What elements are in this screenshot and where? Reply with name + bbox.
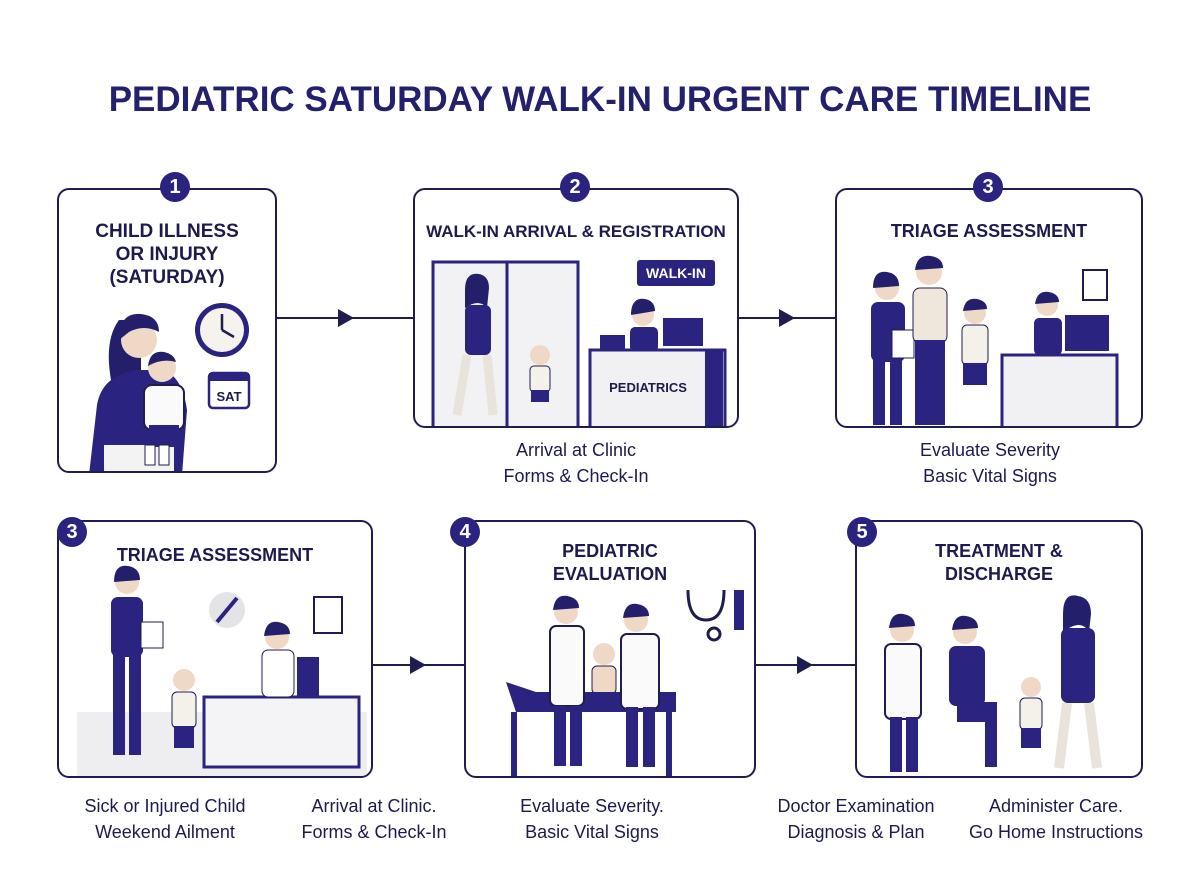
panel: treatment & discharge — [855, 520, 1143, 778]
badge 1: 1 — [169, 176, 181, 198]
caption 2: Arrival at Clinic — [516, 440, 636, 460]
caption row2 4: Doctor Examination — [777, 796, 935, 816]
panel: pediatric evaluation — [464, 520, 756, 778]
arrow: 2 to 3 — [739, 309, 835, 327]
caption row2 2: Forms & Check-In — [301, 822, 447, 842]
heading: CHILD ILLNESS — [95, 221, 239, 242]
badge 2 — [560, 172, 590, 202]
illustration — [884, 595, 1102, 772]
heading: TRIAGE ASSESSMENT — [891, 221, 1087, 241]
caption 3 — [920, 440, 1060, 486]
arrow: row2 2 to 3 — [756, 656, 855, 674]
caption row2 1: Sick or Injured Child — [84, 796, 246, 816]
caption 2: Forms & Check-In — [503, 466, 649, 486]
badge 4 — [450, 517, 480, 547]
heading: WALK-IN ARRIVAL & REGISTRATION — [426, 222, 726, 241]
panel: triage — [835, 188, 1143, 428]
caption row2 1: Weekend Ailment — [95, 822, 235, 842]
caption 3: Basic Vital Signs — [923, 466, 1057, 486]
illustration: nurses and child — [871, 256, 1118, 426]
panel: walk-in arrival — [413, 188, 739, 428]
caption row2 5: Administer Care. — [989, 796, 1123, 816]
illustration: doctors, child, stethoscope — [506, 590, 744, 776]
caption row2 3: Evaluate Severity. — [520, 796, 664, 816]
badge 3 row 2 — [57, 517, 87, 547]
heading: (SATURDAY) — [109, 267, 225, 288]
heading — [935, 541, 1063, 584]
heading: OR INJURY — [116, 244, 218, 265]
badge 5 — [847, 517, 877, 547]
heading — [553, 541, 667, 584]
badge 1 — [160, 172, 190, 202]
heading: TRIAGE ASSESSMENT — [117, 545, 313, 565]
panel: child illness — [57, 188, 277, 473]
arrow: row2 1 to 2 — [373, 656, 464, 674]
heading: EVALUATION — [553, 564, 667, 584]
caption row2 1 — [84, 796, 246, 842]
title: PEDIATRIC SATURDAY WALK-IN URGENT CARE TIMELINE — [109, 80, 1091, 119]
caption row2 2: Arrival at Clinic. — [311, 796, 437, 816]
caption row2 2 — [301, 796, 447, 842]
caption row2 3 — [520, 796, 664, 842]
badge 3 row 2: 3 — [66, 521, 78, 543]
caption 3: Evaluate Severity — [920, 440, 1060, 460]
panel: triage row 2 — [57, 520, 373, 778]
caption row2 5: Go Home Instructions — [969, 822, 1143, 842]
caption row2 3: Basic Vital Signs — [525, 822, 659, 842]
heading — [95, 221, 239, 288]
heading: TREATMENT & — [935, 541, 1063, 561]
caption row2 4: Diagnosis & Plan — [787, 822, 925, 842]
arrow: 1 to 2 — [277, 309, 413, 327]
badge 5: 5 — [856, 521, 868, 543]
badge 4: 4 — [459, 521, 471, 543]
illustration: mother holding child: SAT — [216, 389, 242, 404]
heading: DISCHARGE — [945, 564, 1053, 584]
illustration: mother holding child — [90, 303, 250, 471]
caption row2 4 — [777, 796, 935, 842]
illustration — [77, 566, 367, 776]
badge 3: 3 — [982, 176, 994, 198]
illustration: door, parent, child, reception: WALK-IN — [646, 265, 706, 281]
heading: PEDIATRIC — [562, 541, 658, 561]
illustration: door, parent, child, reception: PEDIATRICS — [609, 380, 687, 395]
illustration: door, parent, child, reception — [432, 260, 726, 426]
badge 2: 2 — [569, 176, 581, 198]
caption row2 5 — [969, 796, 1143, 842]
badge 3 — [973, 172, 1003, 202]
caption 2 — [503, 440, 649, 486]
